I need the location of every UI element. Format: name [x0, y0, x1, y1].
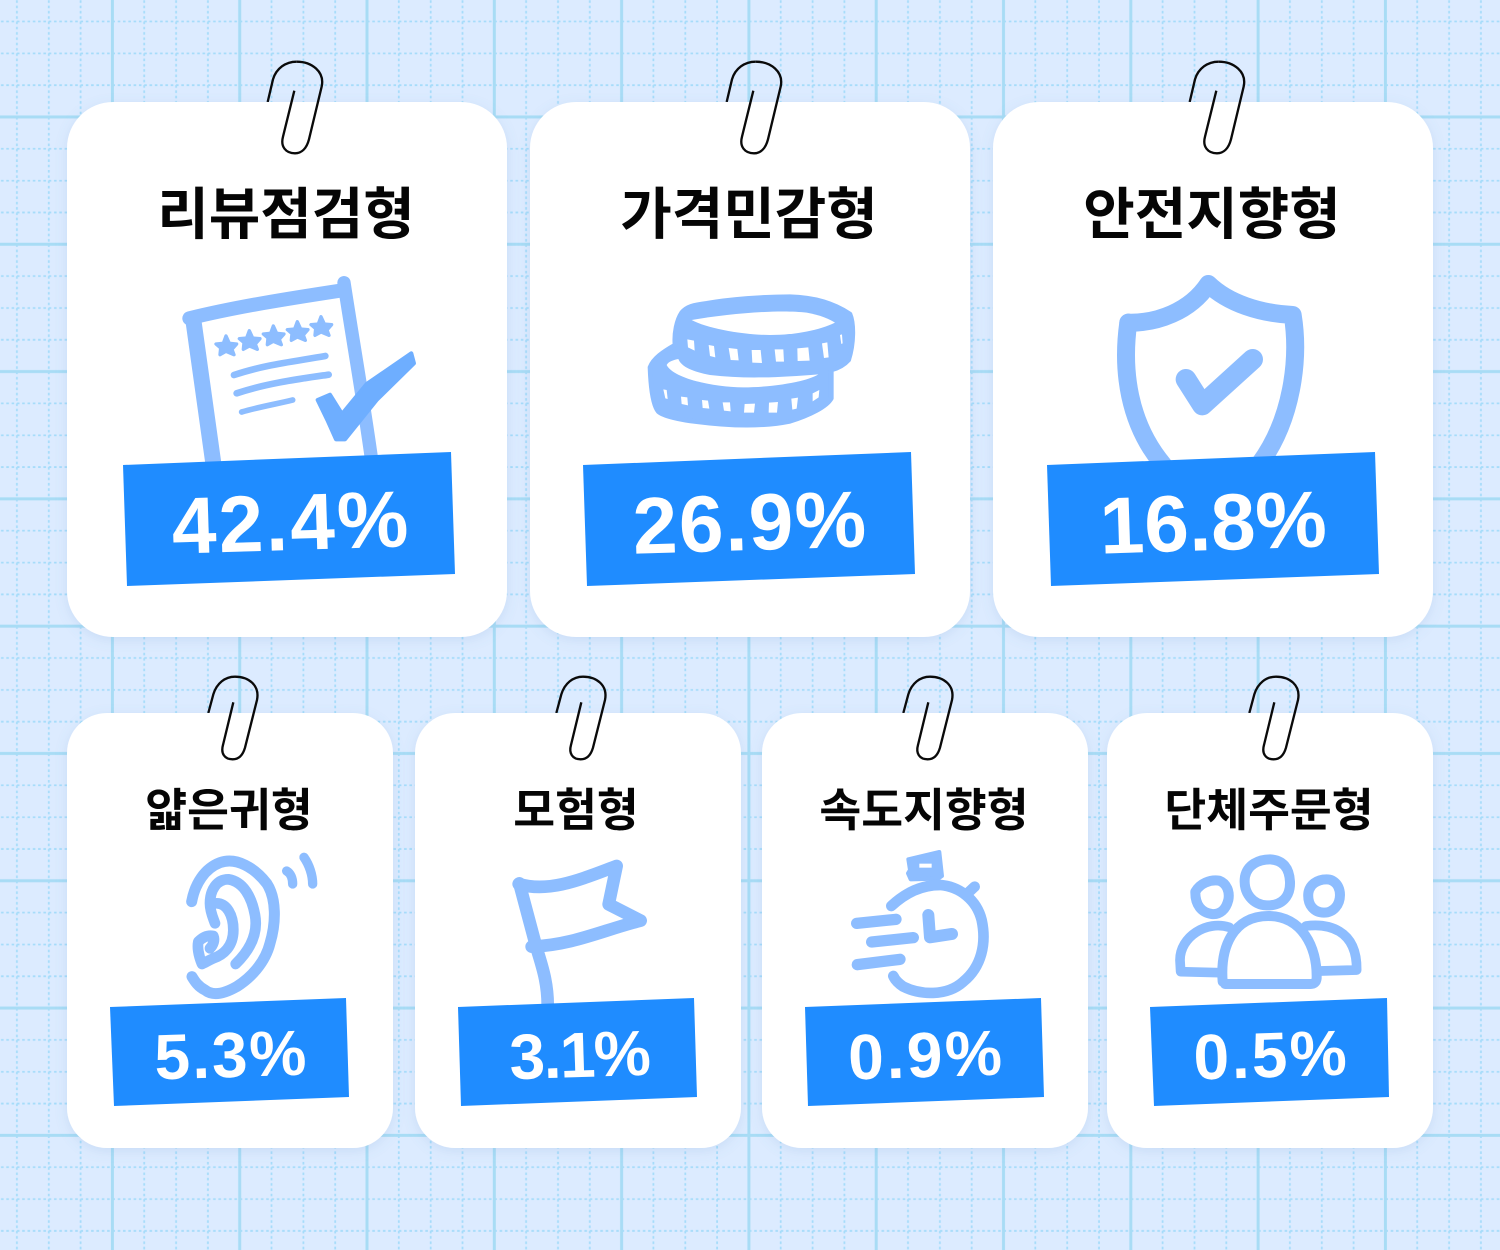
title: 단체주문형 [1164, 785, 1374, 836]
panel: 속도지향형 [762, 677, 1088, 1148]
card [67, 102, 507, 637]
card [67, 713, 393, 1148]
paperclip front [222, 677, 257, 759]
card [762, 713, 1088, 1148]
panel: 모험형 [415, 677, 741, 1148]
card [993, 102, 1433, 637]
title: 얇은귀형 [145, 785, 313, 836]
card [530, 102, 970, 637]
value: 3.1% [508, 1017, 651, 1093]
paperclip front [741, 62, 781, 153]
value tag [123, 452, 455, 586]
value: 0.5% [1192, 1017, 1350, 1093]
value tag [110, 998, 349, 1106]
icon: flag [519, 866, 641, 1008]
value: 0.9% [847, 1017, 1006, 1093]
paperclip front [570, 677, 605, 759]
paperclip back [268, 62, 297, 102]
panel: 가격민감형 [530, 62, 970, 637]
paperclip back [1249, 677, 1276, 713]
icon: stopwatch [857, 852, 983, 993]
panel: 얇은귀형 [67, 677, 393, 1148]
title: 리뷰점검형 [157, 183, 415, 246]
value tag [805, 998, 1044, 1106]
icon: ear [192, 857, 313, 994]
paperclip back [903, 677, 930, 713]
value tag [1047, 452, 1379, 586]
title: 모험형 [513, 785, 639, 836]
panel: 안전지향형 [993, 62, 1433, 637]
panel: 단체주문형 [1107, 677, 1433, 1148]
title: 안전지향형 [1083, 183, 1341, 246]
title: 가격민감형 [620, 183, 878, 246]
value tag [458, 998, 697, 1106]
value: 42.4% [170, 474, 412, 571]
value tag [583, 452, 915, 586]
card [415, 713, 741, 1148]
paperclip front [1263, 677, 1298, 759]
paperclip back [727, 62, 756, 102]
paperclip front [282, 62, 322, 153]
paperclip back [1190, 62, 1219, 102]
icon: coins [650, 297, 853, 425]
paperclip front [1204, 62, 1244, 153]
value: 16.8% [1098, 474, 1328, 571]
title: 속도지향형 [819, 785, 1029, 836]
panel: 리뷰점검형 [67, 62, 507, 637]
card [1107, 713, 1433, 1148]
icon: group of people [1180, 859, 1357, 984]
paperclip front [917, 677, 952, 759]
value tag [1150, 998, 1389, 1106]
icon: review document with stars and check [189, 283, 414, 463]
paperclip back [556, 677, 583, 713]
paperclip back [208, 677, 235, 713]
icon: shield with check [1126, 284, 1295, 465]
value: 5.3% [153, 1017, 309, 1093]
value: 26.9% [631, 474, 869, 571]
